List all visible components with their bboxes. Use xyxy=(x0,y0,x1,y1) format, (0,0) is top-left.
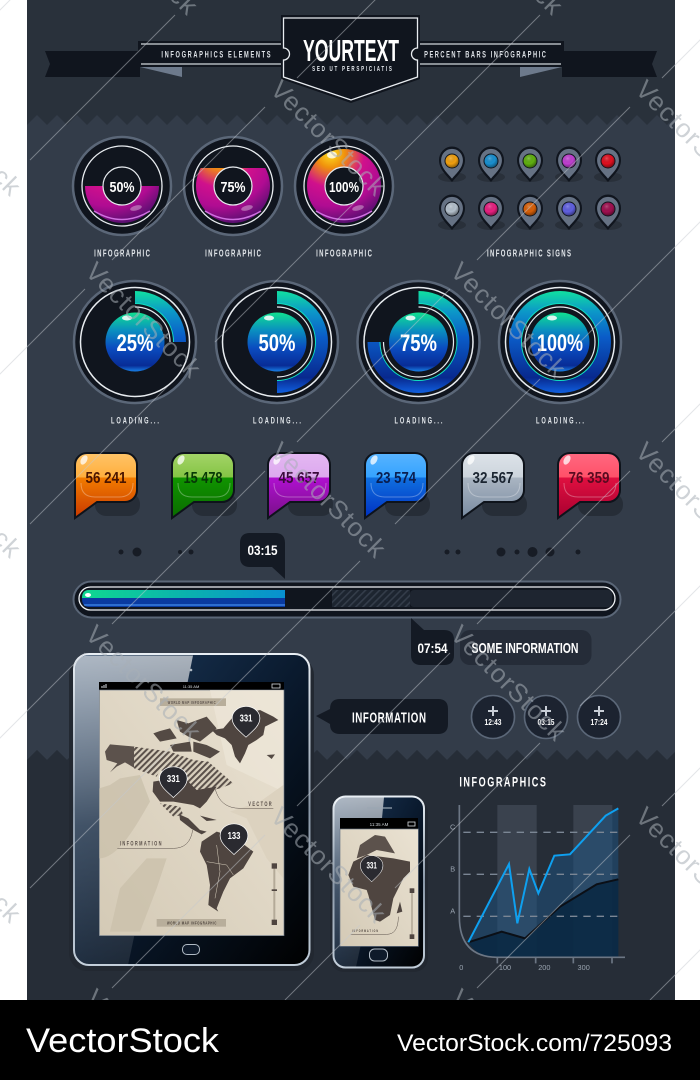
loading labels xyxy=(111,415,584,426)
pin: violet xyxy=(555,194,583,230)
bubble: red: 76 359 xyxy=(568,470,610,487)
watermark text: VectorStock xyxy=(445,256,573,384)
gauge labels xyxy=(94,248,571,259)
lower zigzag edge xyxy=(27,748,675,760)
time button 17:24 xyxy=(578,696,620,738)
gauge 75%: 75% xyxy=(220,179,246,196)
bubble: purple xyxy=(268,453,333,518)
map marker 331 centre xyxy=(159,767,187,798)
pin: green xyxy=(516,146,544,182)
some information label: SOME INFORMATION xyxy=(472,640,578,657)
pin: pink xyxy=(477,194,505,230)
chart: 100 xyxy=(499,963,511,972)
time button 03:15: 03:15 xyxy=(538,718,555,727)
dot row xyxy=(118,547,580,557)
chart: 200 xyxy=(538,963,550,972)
progress bar xyxy=(74,582,620,618)
bubble: blue xyxy=(365,453,430,518)
chart title: INFOGRAPHICS xyxy=(459,774,546,790)
map marker 331 north: 331 xyxy=(240,713,253,724)
phone screen map xyxy=(340,829,418,946)
tablet screen map: WORLD MAP INFOGRAPHIC xyxy=(168,700,216,705)
bubble: red xyxy=(558,453,623,518)
map pin signs xyxy=(438,146,622,230)
watermark text: VectorStock xyxy=(265,74,393,202)
chart: C xyxy=(450,822,456,831)
time button 17:24: 17:24 xyxy=(590,718,608,727)
gauge labels: INFOGRAPHIC SIGNS xyxy=(487,248,571,259)
tablet screen map xyxy=(99,690,284,936)
pin: dark orange xyxy=(516,194,544,230)
map marker 331 centre: 331 xyxy=(167,773,180,785)
tablet: 11:35 AM xyxy=(183,684,199,689)
phone map marker: 331 xyxy=(366,861,377,871)
footer bar xyxy=(0,1000,700,1080)
some information label xyxy=(460,630,592,665)
pin: crimson xyxy=(594,194,622,230)
gauge labels: INFOGRAPHIC xyxy=(316,248,372,259)
footer url: VectorStock.com/725093 xyxy=(397,1030,672,1057)
bubble: blue: 23 574 xyxy=(376,470,416,487)
tablet xyxy=(69,654,314,971)
loading gauge 50% xyxy=(216,281,338,403)
tooltip 03:15 xyxy=(240,533,285,579)
tooltip 03:15: 03:15 xyxy=(248,542,278,558)
phone: 11:35 AM xyxy=(370,822,389,827)
chart: A xyxy=(450,906,455,915)
map marker 133: 133 xyxy=(228,830,241,842)
gauge labels: INFOGRAPHIC xyxy=(94,248,150,259)
loading gauge 75% xyxy=(358,281,480,403)
bubble: green xyxy=(172,453,237,518)
tablet screen map: WORLD MAP INFOGRAPHIC xyxy=(167,921,217,926)
bubble: silver xyxy=(462,453,527,518)
mid section xyxy=(27,125,675,750)
loading gauge 75%: 75% xyxy=(400,330,437,357)
gauge labels: INFOGRAPHIC xyxy=(205,248,261,259)
bubble: orange xyxy=(75,453,140,518)
loading labels: LOADING... xyxy=(395,415,442,426)
loading gauge 25%: 25% xyxy=(116,330,154,357)
gauge 50%: 50% xyxy=(110,179,134,196)
tooltip 07:54 xyxy=(411,618,454,665)
pin: red xyxy=(594,146,622,182)
pin: purple xyxy=(555,146,583,182)
bubble: purple: 45 657 xyxy=(278,470,320,487)
watermark text: VectorStock xyxy=(80,619,208,747)
watermark text: VectorStock xyxy=(80,256,208,384)
tooltip 07:54: 07:54 xyxy=(418,640,448,656)
loading gauge 25% xyxy=(74,281,196,403)
information callout xyxy=(316,699,448,734)
watermark text: VectorStock xyxy=(445,619,573,747)
tablet screen map: VECTOR xyxy=(248,801,272,808)
loading gauge 50%: 50% xyxy=(258,330,296,357)
pin: silver xyxy=(438,194,466,230)
phone home button xyxy=(370,949,388,961)
chart xyxy=(450,774,625,972)
bubble: silver: 32 567 xyxy=(472,470,514,487)
chart: 0 xyxy=(459,963,463,972)
loading gauge 100% xyxy=(499,281,621,403)
chart: 300 xyxy=(578,963,590,972)
right ribbon text: PERCENT BARS INFOGRAPHIC xyxy=(424,49,546,60)
gauge 100% xyxy=(295,137,393,235)
tablet screen map: INFORMATION xyxy=(120,840,161,848)
footer logo: VectorStock xyxy=(26,1022,220,1060)
loading gauge 100%: 100% xyxy=(537,330,583,357)
pin: cyan xyxy=(477,146,505,182)
tablet home button xyxy=(182,944,200,954)
gauge 50% xyxy=(73,137,171,235)
bubble: orange: 56 241 xyxy=(86,470,127,487)
bubble: green: 15 478 xyxy=(184,470,223,487)
phone screen map: INFORMATION xyxy=(352,928,378,933)
zigzag edge xyxy=(27,115,675,125)
time button 03:15 xyxy=(524,696,568,738)
gauge 100%: 100% xyxy=(329,179,359,196)
time button 12:43: 12:43 xyxy=(484,718,502,727)
time button 12:43 xyxy=(472,696,514,738)
chart: B xyxy=(450,864,455,873)
loading labels: LOADING... xyxy=(253,415,301,426)
map marker 133 xyxy=(220,824,248,855)
title: YOURTEXT xyxy=(303,33,399,68)
information callout: INFORMATION xyxy=(352,709,426,726)
loading labels: LOADING... xyxy=(111,415,159,426)
map marker 331 north xyxy=(232,706,260,737)
watermark text: VectorStock xyxy=(265,436,393,564)
left ribbon text: INFOGRAPHICS ELEMENTS xyxy=(161,49,271,60)
gauge 75% xyxy=(184,137,282,235)
watermark text: VectorStock xyxy=(265,801,393,929)
lower section xyxy=(27,760,675,1000)
pin: orange xyxy=(438,146,466,182)
header banner xyxy=(45,15,657,103)
subtitle: SED UT PERSPICIATIS xyxy=(312,65,392,73)
loading labels: LOADING... xyxy=(536,415,584,426)
phone xyxy=(330,796,428,972)
